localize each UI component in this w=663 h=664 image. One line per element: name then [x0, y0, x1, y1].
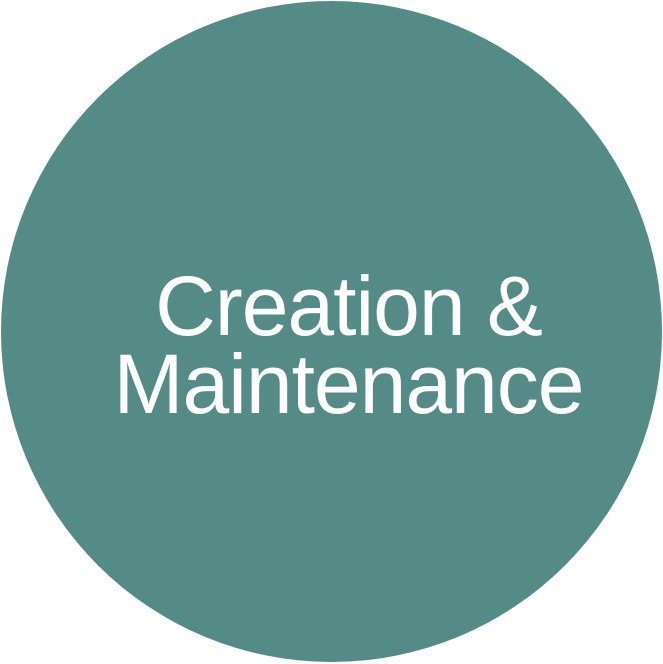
title text: Creation &: [155, 259, 542, 353]
title text: Maintenance: [114, 337, 584, 431]
title text: [114, 259, 584, 431]
